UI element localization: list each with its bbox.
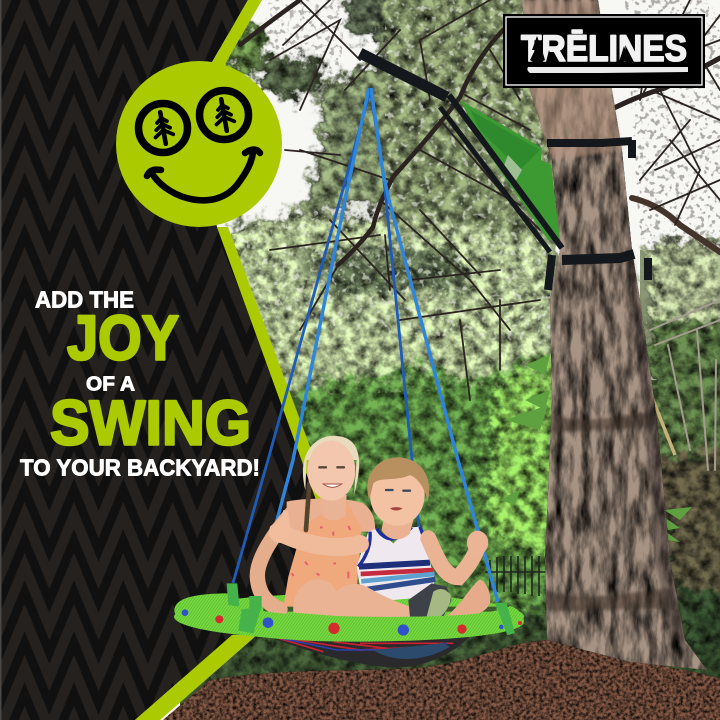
ring clips <box>227 583 515 635</box>
boy hand right <box>467 531 488 555</box>
TO YOUR BACKYARD!: TO YOUR BACKYARD! <box>20 454 260 480</box>
boy tank top <box>357 527 435 601</box>
JOY: JOY <box>67 304 179 374</box>
under-fill for lower garden <box>180 380 720 720</box>
fence <box>485 556 547 596</box>
tree trunk <box>522 0 707 670</box>
SWING: SWING <box>50 388 251 458</box>
boy eyes and mouth <box>386 486 410 494</box>
pine highlights <box>232 215 560 400</box>
ADD THE: ADD THE <box>35 286 134 312</box>
trunk shadow band <box>545 412 675 611</box>
headline <box>20 286 260 480</box>
stand fabric shaded fold <box>470 110 540 170</box>
boy <box>268 457 490 618</box>
panel: dark chevron side panel <box>0 0 340 720</box>
bare branches <box>240 0 720 470</box>
girl neck <box>320 495 347 520</box>
fabric logo <box>503 155 522 182</box>
swing ropes <box>233 88 498 602</box>
net under the seat <box>260 633 470 667</box>
lime diagonal band, top <box>210 0 262 66</box>
boy hair <box>367 457 429 502</box>
twig clutter, upper left <box>265 0 345 80</box>
girl eyes and smile <box>319 464 344 471</box>
front of swing ring <box>174 593 524 642</box>
boy arm right <box>428 538 478 577</box>
back of swing ring <box>174 593 524 640</box>
logo: Trēlines badge <box>503 14 705 88</box>
left eye <box>138 104 188 152</box>
foliage masses <box>205 0 720 690</box>
wordmark trees <box>530 36 629 62</box>
rough underline <box>527 67 688 73</box>
garden visible inside the ring <box>263 607 497 612</box>
leaves <box>500 355 692 542</box>
stand fabric <box>460 100 560 240</box>
tank trim <box>358 527 430 567</box>
badge border <box>506 17 702 85</box>
girl <box>257 436 375 609</box>
legs <box>293 579 410 618</box>
twig clutter, upper right <box>625 0 720 245</box>
lime diagonal band, bottom <box>135 635 257 720</box>
girl shoulders <box>287 499 375 532</box>
sky gaps in the pines <box>232 0 552 345</box>
OF A: OF A <box>86 372 135 396</box>
shirt stripes <box>359 563 430 567</box>
girl arm <box>257 512 293 609</box>
swing and children <box>174 436 524 667</box>
boy arm left <box>285 535 360 547</box>
girl hair <box>303 436 359 495</box>
smiley disc <box>116 61 282 227</box>
boy neck <box>382 520 413 539</box>
smile <box>147 150 260 200</box>
boy hand left <box>268 510 290 543</box>
mulch ground <box>163 640 720 720</box>
panel left edge <box>0 0 2 720</box>
ring beads <box>182 609 522 636</box>
trunk right shadow <box>624 250 685 640</box>
boy shoe <box>408 583 452 617</box>
badge background <box>503 14 705 88</box>
boy head <box>370 464 425 526</box>
pale broken trunk <box>645 380 675 455</box>
girl braid <box>306 483 309 530</box>
sunlit trunk top <box>524 0 622 160</box>
lime diagonal band, right <box>217 227 330 500</box>
right eye <box>200 90 248 140</box>
icon: smiley face with tree eyes <box>116 61 282 227</box>
tree stand bracket <box>360 53 648 290</box>
girl face <box>307 441 355 501</box>
wordmark: TRĒLINES <box>521 28 687 69</box>
top pattern <box>292 526 350 578</box>
girl top <box>283 500 362 607</box>
